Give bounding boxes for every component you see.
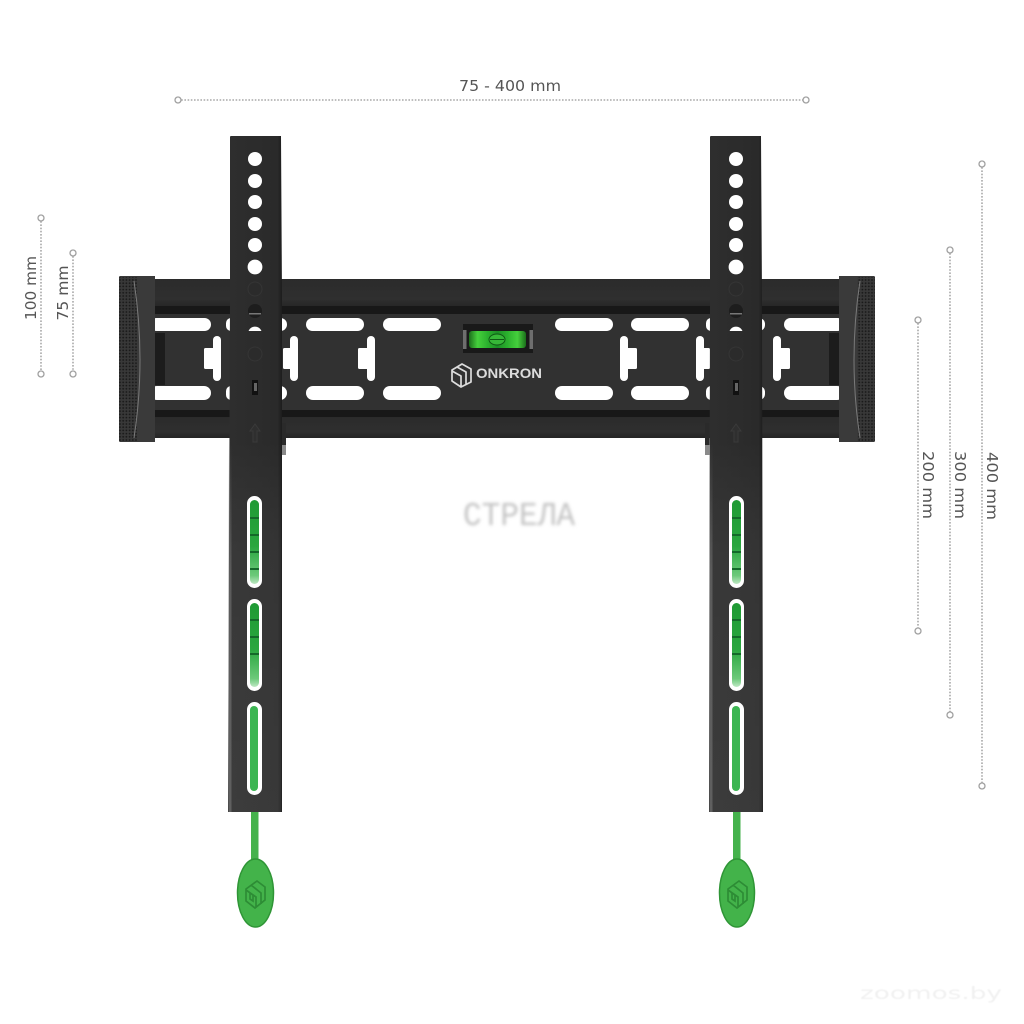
right green pull tab [720, 812, 754, 927]
green slots [247, 496, 262, 795]
dimension: VESA width 75-400 mm: 75 - 400 mm [459, 77, 561, 95]
right green slots [729, 496, 744, 795]
zoomos watermark: zoomos.by [860, 984, 1002, 1004]
dimension: 200 mm: 200 mm [919, 451, 937, 519]
dimension: 100 mm: 100 mm [22, 256, 40, 320]
dimension: 400 mm [979, 161, 1001, 789]
arm holes [248, 152, 262, 274]
dimension: 100 mm [22, 215, 44, 377]
left vertical arm [228, 136, 286, 812]
ONKRON logo [452, 364, 542, 387]
dimension: VESA width 75-400 mm [175, 77, 809, 103]
right arm holes [729, 152, 743, 274]
dimension: 75 mm: 75 mm [54, 266, 72, 320]
left green pull tab [238, 812, 274, 927]
dimension: 400 mm: 400 mm [983, 452, 1001, 520]
dimension: 75 mm [54, 250, 76, 377]
wall plate [150, 279, 845, 438]
right arm dimples and small features [729, 282, 743, 442]
dimension: 300 mm: 300 mm [951, 451, 969, 519]
arm dimples and small features [248, 282, 262, 442]
keyhole slots [204, 336, 790, 381]
bubble level [463, 324, 533, 353]
dimension: 300 mm [947, 247, 969, 718]
right end cap [839, 276, 875, 442]
ONKRON logo: ONKRON [476, 366, 542, 381]
dimension: 200 mm [915, 317, 937, 634]
left end cap [119, 276, 155, 442]
blurred СТРЕЛА watermark: СТРЕЛА [463, 498, 575, 535]
right vertical arm [705, 136, 763, 812]
horizontal mounting slots [150, 318, 844, 400]
